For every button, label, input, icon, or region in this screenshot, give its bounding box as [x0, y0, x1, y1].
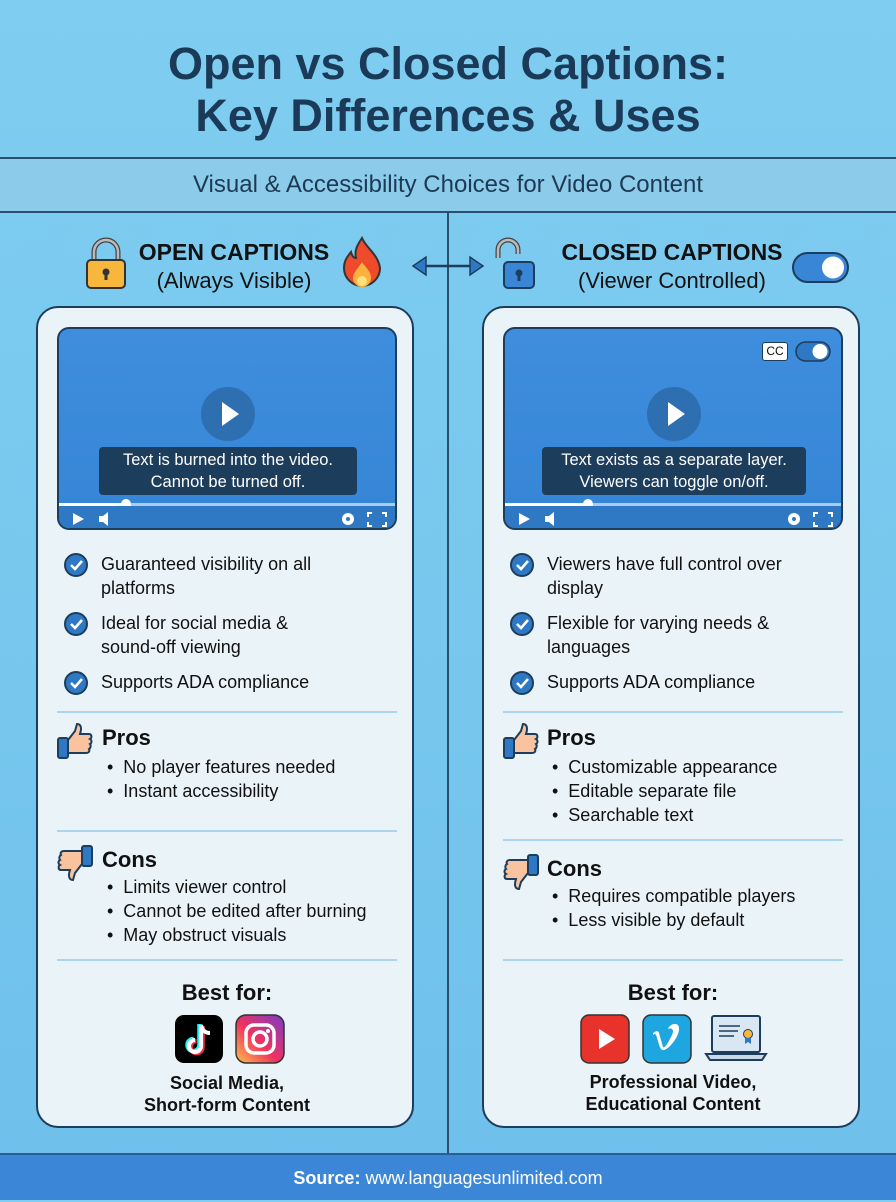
best for: closed: Educational Content — [586, 1094, 760, 1114]
cons: open: • May obstruct visuals — [107, 925, 286, 945]
icon: laptop certificate — [704, 1015, 768, 1061]
footer: source: Source: www.languagesunlimited.com — [293, 1168, 603, 1188]
icon: play — [647, 387, 701, 441]
icon: play — [201, 387, 255, 441]
pros: closed: • Customizable appearance — [552, 757, 777, 777]
checklist: closed: display — [547, 578, 603, 598]
best for: open: Social Media, — [170, 1073, 284, 1093]
header: open captions — [139, 239, 329, 293]
icon: cc toggle: CC — [766, 344, 784, 358]
checklist: open — [64, 553, 311, 695]
icon: vimeo — [642, 1014, 692, 1064]
title — [168, 38, 728, 141]
panel: open captions — [36, 306, 414, 1128]
cons: closed: Cons — [547, 856, 602, 881]
checklist: open: Guaranteed visibility on all — [101, 554, 311, 574]
icon: youtube — [580, 1014, 630, 1064]
video player: open — [57, 327, 397, 530]
panel: closed captions — [482, 306, 860, 1128]
icon: fire — [343, 236, 381, 287]
header: open captions: (Always Visible) — [157, 268, 311, 293]
caption text: Text is burned into the video. — [123, 451, 333, 469]
checklist: open: sound-off viewing — [101, 637, 241, 657]
pros: open: • Instant accessibility — [107, 781, 278, 801]
best for: open: Best for: — [182, 980, 272, 1005]
best for: open: Short-form Content — [144, 1095, 310, 1115]
best for: closed: Professional Video, — [590, 1072, 756, 1092]
pros: open: • No player features needed — [107, 757, 335, 777]
caption text — [99, 447, 357, 495]
icon: thumbs down — [58, 845, 93, 881]
cons: closed: • Less visible by default — [552, 910, 744, 930]
controls — [505, 506, 845, 532]
subtitle band — [0, 157, 896, 213]
caption text: Viewers can toggle on/off. — [579, 473, 769, 491]
pros: closed — [503, 723, 777, 825]
cons: open — [58, 845, 366, 945]
checklist: closed — [510, 553, 782, 695]
cons: open: • Cannot be edited after burning — [107, 901, 366, 921]
header: open captions: OPEN CAPTIONS — [139, 239, 329, 265]
header: closed captions: (Viewer Controlled) — [578, 268, 766, 293]
best for: closed: Best for: — [628, 980, 718, 1005]
best for: open — [144, 980, 310, 1115]
header: closed captions: CLOSED CAPTIONS — [561, 239, 783, 265]
controls — [59, 506, 399, 532]
cons: open: • Limits viewer control — [107, 877, 286, 897]
caption text — [542, 447, 806, 495]
footer: source — [0, 1153, 896, 1200]
pros: open — [57, 723, 335, 801]
checklist: closed: languages — [547, 637, 630, 657]
checklist: open: Supports ADA compliance — [101, 672, 309, 692]
pros: open: Pros — [102, 725, 151, 750]
icon: thumbs down — [504, 854, 539, 890]
icon: thumbs up — [57, 723, 92, 759]
subtitle band: Visual & Accessibility Choices for Video Content — [193, 171, 703, 198]
title: Key Differences & Uses — [195, 90, 701, 141]
cons: closed — [504, 854, 795, 930]
video player: closed — [503, 327, 843, 530]
best for: closed — [580, 980, 768, 1114]
checklist: closed: Viewers have full control over — [547, 554, 782, 574]
caption text: Text exists as a separate layer. — [561, 451, 787, 469]
checklist: open: Ideal for social media & — [101, 613, 288, 633]
icon: instagram — [235, 1014, 285, 1064]
icon: thumbs up — [503, 723, 538, 759]
checklist: closed: Flexible for varying needs & — [547, 613, 769, 633]
caption text: Cannot be turned off. — [151, 473, 305, 491]
pros: closed: Pros — [547, 725, 596, 750]
title: Open vs Closed Captions: — [168, 38, 728, 89]
icon: padlock open — [496, 238, 535, 289]
icon: cc toggle — [762, 342, 788, 361]
cons: open: Cons — [102, 847, 157, 872]
icon: padlock closed — [86, 238, 126, 289]
arrow: double — [412, 256, 484, 276]
icon: toggle — [792, 252, 849, 283]
pros: closed: • Searchable text — [552, 805, 693, 825]
checklist: closed: Supports ADA compliance — [547, 672, 755, 692]
header: closed captions — [561, 239, 783, 293]
cons: closed: • Requires compatible players — [552, 886, 795, 906]
pros: closed: • Editable separate file — [552, 781, 736, 801]
icon: tiktok — [175, 1015, 223, 1063]
checklist: open: platforms — [101, 578, 175, 598]
